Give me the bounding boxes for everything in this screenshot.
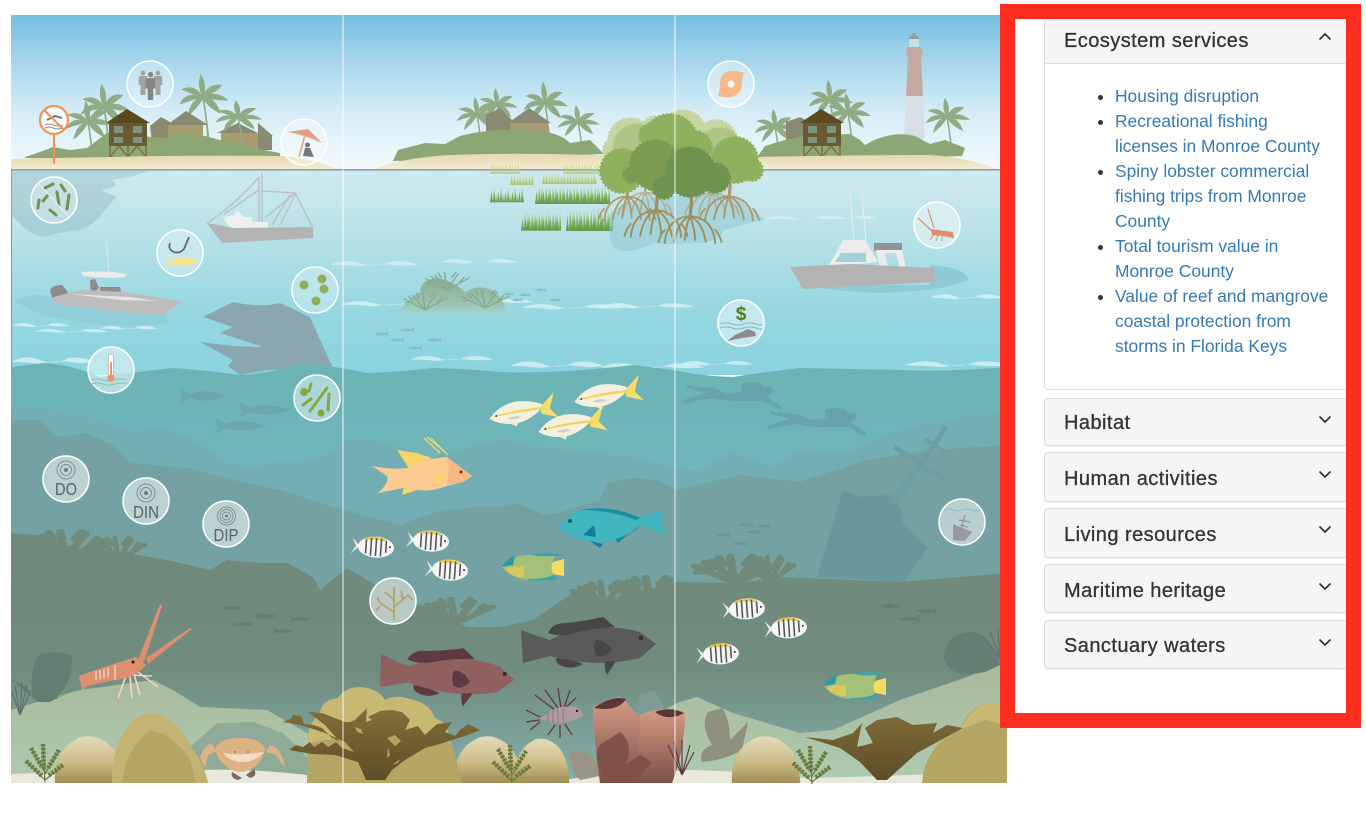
icon: dissolved inorganic nitrogen: DIN [133,502,159,522]
icon: tourism dollar: $ [736,304,747,325]
icon: shipwreck [939,499,985,545]
spiny lobster [79,604,192,698]
sand floor [11,770,1007,783]
elkhorn coral: centre [282,708,480,780]
shipwreck silhouette [817,425,948,582]
panel: accordion sidebar [1015,19,1346,713]
island: left with palms and huts [11,75,340,170]
icon: community people [127,61,173,107]
seabed hills [11,660,1007,783]
icon: hook and fish [157,230,203,276]
island: right with palms, hut and lighthouse [755,32,1000,170]
sergeant major fish [350,529,808,666]
icon: dissolved oxygen [43,456,89,502]
crab burrow [190,722,313,775]
icon: coral [370,578,416,624]
shadow: centre console wake [15,295,170,326]
icon: thermometer [88,347,134,393]
parrotfish [558,507,667,548]
panel: Human activities: Human activities [1064,468,1218,490]
coral mound in shallow water [392,272,510,322]
small fish on dark reef [223,522,937,635]
panel: Living resources: Living resources [1064,524,1217,546]
crab [200,738,285,780]
barrel sponges [593,697,694,783]
panel: Maritime heritage [1044,564,1364,613]
panel: Habitat [1044,398,1364,446]
icon: bacteria [31,177,77,223]
icon: algae [294,375,340,421]
waves: surface ripples [11,172,1009,369]
yellowtail snappers [487,375,644,443]
mid reef layer [11,420,1007,783]
icon: lighthouse [904,32,925,142]
queen angelfish [502,553,887,700]
island: centre with palms and huts [372,83,620,170]
icon: dissolved inorganic phosphorus [203,501,249,547]
boat: centre console [50,237,182,315]
sky [11,15,1007,171]
panel: Habitat: Habitat [1064,412,1131,434]
elkhorn coral: right [805,717,963,780]
list: indicator links: Total tourism value in Monroe County [1115,236,1278,281]
sea fans silhouettes [12,630,1000,780]
list: indicator links: Value of reef and mangrove coastal protection from storms in Florida Keys [1115,286,1328,356]
boat: shrimp trawler [207,173,313,243]
panel: Maritime heritage: Maritime heritage [1064,580,1226,602]
list: indicator links: Spiny lobster commercial fishing trips from Monroe County [1115,161,1309,231]
heading: Ecosystem services [1045,19,1363,64]
icon: dissolved inorganic phosphorus: DIP [214,525,238,545]
staghorn coral plants [26,744,830,784]
panel: Sanctuary waters: Sanctuary waters [1064,635,1226,657]
small fish school near mound [374,288,561,351]
dark foreground reef [11,532,1007,783]
water surface [11,170,1007,375]
icon: beach umbrella [281,119,327,165]
red grouper [377,641,517,711]
icon: tourism dollar [718,300,764,346]
panel: Human activities [1044,452,1364,502]
seagrass beds [490,162,613,231]
mangrove trees [598,110,763,243]
diver silhouette lower [767,408,866,436]
background reef layer [11,408,1007,783]
sign: no swimming [40,106,68,164]
icon: dissolved inorganic nitrogen [123,478,169,524]
fish silhouettes [181,388,290,434]
rocks and brain corals [55,687,1007,783]
deep water [11,363,1007,783]
black grouper [521,617,656,675]
shadow under mangrove [609,194,765,251]
shadow: left shallow area [11,170,150,237]
hogfish [372,437,472,495]
diver silhouette upper [683,382,782,410]
panel dividers [342,15,676,783]
list: indicator links: Recreational fishing licenses in Monroe County [1115,111,1320,156]
list: indicator links [1098,86,1328,356]
lionfish [526,688,583,738]
panel: Living resources [1044,508,1364,558]
red highlight frame [1000,4,1361,728]
shadow: reef under surface [200,302,333,375]
icon: phytoplankton [292,267,338,313]
shadow: sport fisher boat wake [800,265,968,293]
list: indicator links: Housing disruption [1115,86,1259,106]
boat: sport fisher [790,192,935,289]
icon: spiny lobster [914,202,960,248]
panel: Ecosystem services expanded [1044,18,1364,390]
icon: dissolved oxygen: DO [55,479,77,499]
icon: hurricane [708,61,754,107]
panel: Sanctuary waters [1044,620,1364,669]
heading: Ecosystem services: Ecosystem services [1064,30,1249,52]
